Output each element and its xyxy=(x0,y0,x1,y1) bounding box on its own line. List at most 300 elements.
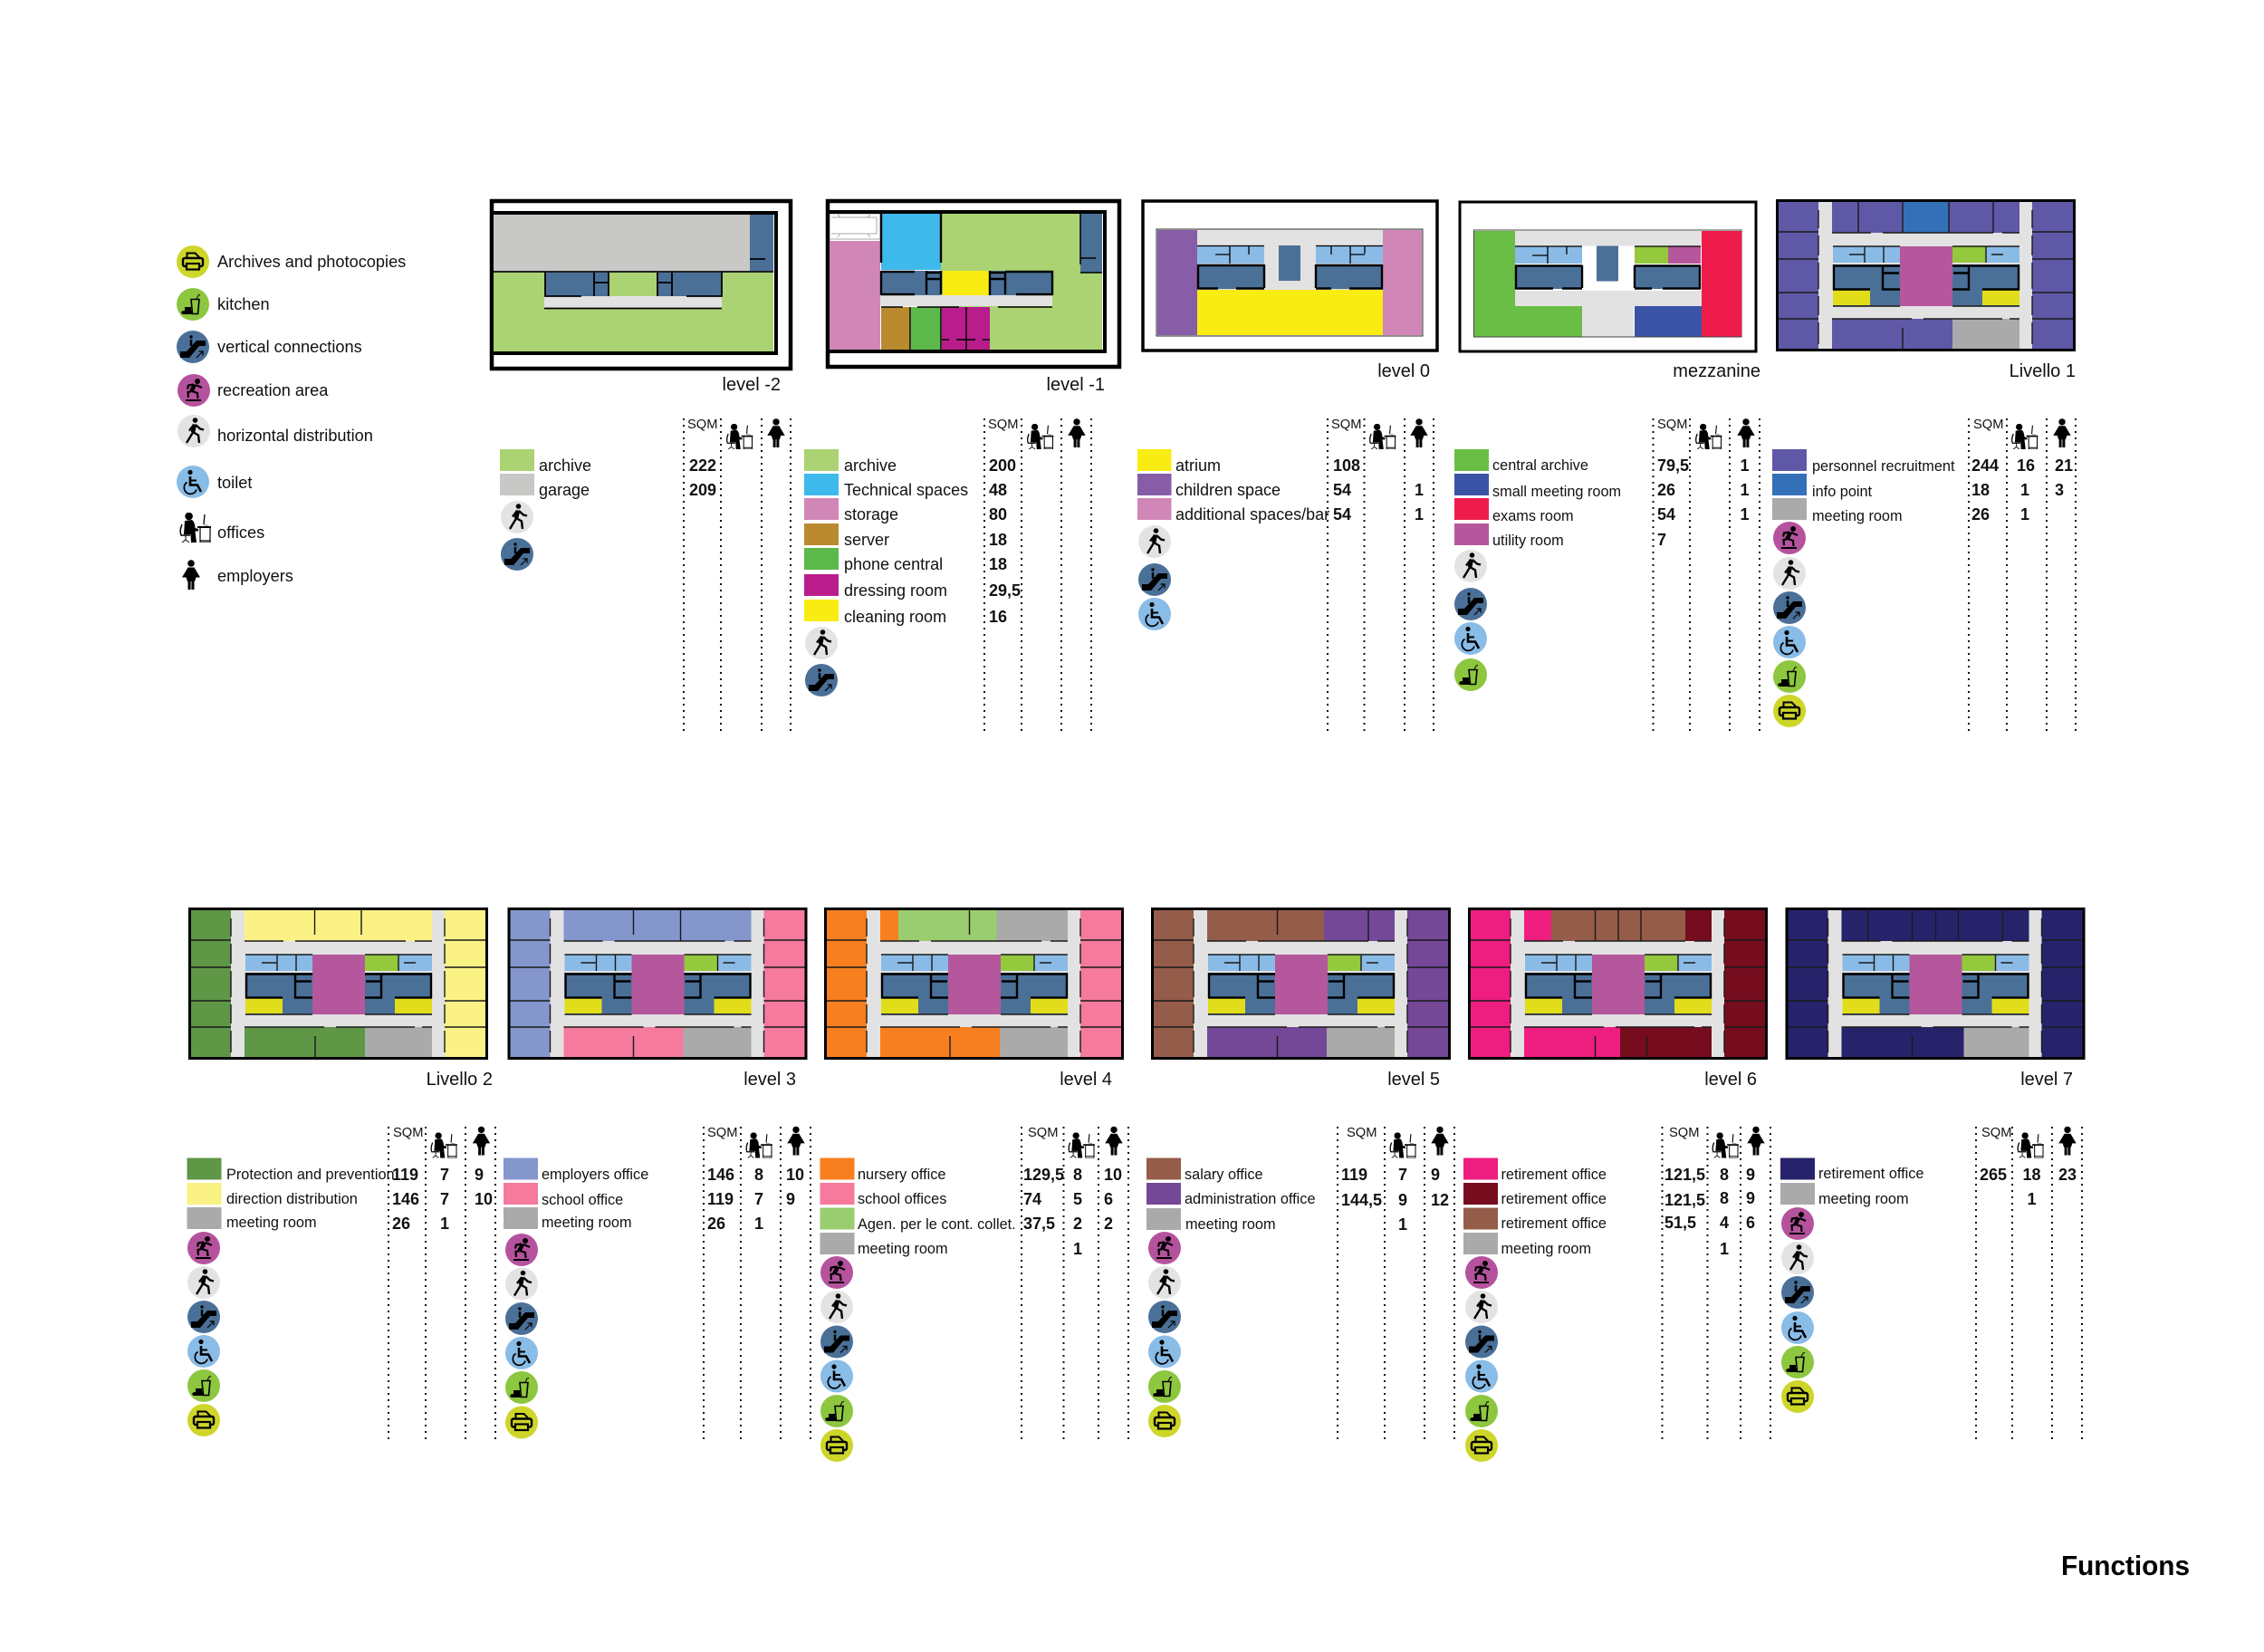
row: school office xyxy=(504,1183,795,1208)
legend item: vertical connections xyxy=(177,331,362,363)
icon: archives and photocopies xyxy=(505,1406,538,1438)
table rows xyxy=(1463,1157,1755,1462)
icon: horizontal distribution xyxy=(187,1266,220,1299)
row: dressing room: dressing room xyxy=(844,581,947,600)
icon: kitchen xyxy=(187,1369,220,1402)
floor plan: level 6 xyxy=(1468,908,1768,1060)
floor plan: level 4 xyxy=(824,908,1124,1060)
column rules xyxy=(684,418,791,735)
row: meeting room xyxy=(1772,498,2029,524)
label: Livello 1: Livello 1 xyxy=(2010,361,2076,381)
row: employers office: 10 xyxy=(786,1166,804,1184)
row: direction distribution xyxy=(187,1183,493,1208)
row: server: server xyxy=(844,531,889,549)
row: server xyxy=(804,523,1007,549)
row: phone central xyxy=(804,548,1007,573)
legend item: kitchen: kitchen xyxy=(217,295,270,313)
legend item: toilet xyxy=(177,466,252,498)
row: info point: info point xyxy=(1812,484,1873,500)
row: storage xyxy=(804,498,1007,523)
row: administration office: 12 xyxy=(1431,1191,1449,1209)
table header: SQM xyxy=(988,418,1018,432)
icon: horizontal distribution xyxy=(505,1268,538,1301)
icon: toilet xyxy=(1773,626,1806,658)
table header: SQM xyxy=(1331,418,1361,432)
row: nursery office: nursery office xyxy=(858,1167,945,1183)
row: additional spaces/bar: additional spaces/bar xyxy=(1175,505,1329,523)
row: meeting room: 1 xyxy=(754,1215,763,1233)
row: central archive: 1 xyxy=(1740,456,1750,475)
row: school office: school office xyxy=(542,1192,623,1208)
row: administration office xyxy=(1146,1183,1449,1209)
row: cleaning room: cleaning room xyxy=(844,608,946,626)
row: retirement office: 265 xyxy=(1980,1166,2007,1184)
row: school offices: 74 xyxy=(1023,1190,1041,1208)
table header xyxy=(1981,1126,2077,1157)
row: administration office: 9 xyxy=(1398,1191,1407,1209)
table header: SQM xyxy=(1669,1126,1699,1140)
row: protection and prevention: 119 xyxy=(392,1166,418,1184)
column rules xyxy=(704,1127,811,1443)
row: retirement office (pink): 8 xyxy=(1720,1166,1729,1184)
legend item: archives and photocopies: Archives and photocopies xyxy=(217,253,406,271)
row: salary office: 7 xyxy=(1398,1166,1407,1184)
row: exams room: exams room xyxy=(1492,508,1574,524)
icon: toilet xyxy=(1781,1311,1814,1344)
row: meeting room xyxy=(820,1233,1082,1258)
icon: toilet xyxy=(1138,598,1171,630)
row: phone central: 18 xyxy=(989,555,1007,573)
row: personnel recruitment: 21 xyxy=(2055,456,2073,475)
row: school offices xyxy=(820,1183,1113,1208)
label: mezzanine: mezzanine xyxy=(1673,361,1760,381)
row: retirement office (brown) xyxy=(1463,1208,1755,1232)
table: level -1 xyxy=(804,418,1091,735)
icon: kitchen xyxy=(820,1395,853,1427)
label: level 6: level 6 xyxy=(1704,1070,1757,1090)
table rows xyxy=(187,1157,493,1436)
table header xyxy=(707,1126,805,1157)
row: meeting room: 1 xyxy=(1720,1240,1729,1258)
floor plan: level -2 xyxy=(492,201,791,369)
icon: vertical connections xyxy=(805,664,838,696)
row: direction distribution: direction distribution xyxy=(226,1191,358,1207)
row: meeting room: meeting room xyxy=(1818,1191,1909,1207)
row: children space: 1 xyxy=(1415,481,1424,499)
row: garage: 209 xyxy=(689,481,716,499)
row: meeting room xyxy=(1146,1208,1407,1234)
row: agen. per le cont. collet. xyxy=(820,1208,1113,1233)
icon: kitchen xyxy=(1781,1346,1814,1378)
table header: SQM xyxy=(393,1126,423,1140)
column rules xyxy=(389,1127,495,1443)
row: meeting room xyxy=(504,1207,763,1233)
column rules xyxy=(1328,418,1434,735)
icon: recreation area xyxy=(820,1256,853,1289)
table: level 7 xyxy=(1780,1126,2082,1443)
row: agen. per le cont. collet.: 2 xyxy=(1104,1215,1113,1233)
row: employers office: 146 xyxy=(707,1166,734,1184)
row: agen. per le cont. collet.: Agen. per le cont. collet. xyxy=(858,1216,1016,1233)
row: personnel recruitment: personnel recruitment xyxy=(1812,458,1955,475)
row: retirement office xyxy=(1780,1157,2077,1184)
row: retirement office (dark red): 121,5 xyxy=(1664,1191,1705,1209)
icon: horizontal distribution xyxy=(1465,1291,1498,1323)
legend item: offices xyxy=(180,513,264,543)
table rows xyxy=(804,449,1021,696)
table header: SQM xyxy=(1981,1126,2011,1140)
row: retirement office (pink): retirement office xyxy=(1501,1167,1607,1183)
floor plan: level -1 xyxy=(828,201,1119,367)
row: retirement office (dark red) xyxy=(1463,1183,1755,1209)
row: cleaning room xyxy=(804,600,1007,626)
icon: vertical connections xyxy=(1465,1326,1498,1359)
row: technical spaces: 48 xyxy=(989,481,1007,499)
icon: horizontal distribution xyxy=(1138,525,1171,558)
legend item: recreation area: recreation area xyxy=(217,381,329,399)
column rules xyxy=(984,418,1091,735)
row: dressing room xyxy=(804,574,1021,600)
icon: horizontal distribution xyxy=(820,1291,853,1323)
row: nursery office xyxy=(820,1157,1122,1184)
icon: kitchen xyxy=(1465,1395,1498,1427)
legend item: offices: offices xyxy=(217,523,264,542)
row: salary office: salary office xyxy=(1185,1167,1263,1183)
floor plan: mezzanine xyxy=(1460,202,1756,351)
row: small meeting room xyxy=(1454,474,1750,500)
icon: recreation area xyxy=(505,1234,538,1266)
row: exams room: 1 xyxy=(1740,505,1750,523)
row: archive xyxy=(804,449,1016,475)
row: protection and prevention: Protection and prevention xyxy=(226,1167,395,1183)
row: garage: garage xyxy=(539,481,590,499)
row: retirement office (brown): 6 xyxy=(1746,1214,1755,1232)
row: exams room: 54 xyxy=(1657,505,1675,523)
icon: vertical connections xyxy=(1454,588,1487,620)
icon: archives and photocopies xyxy=(820,1429,853,1462)
row: direction distribution: 7 xyxy=(440,1190,449,1208)
row: utility room: utility room xyxy=(1492,533,1564,549)
row: administration office: 144,5 xyxy=(1341,1191,1382,1209)
row: direction distribution: 146 xyxy=(392,1190,419,1208)
table rows xyxy=(500,449,716,571)
icon: recreation area xyxy=(1465,1256,1498,1289)
row: protection and prevention: 9 xyxy=(475,1166,484,1184)
row: archive xyxy=(500,449,716,475)
row: administration office: administration office xyxy=(1185,1191,1315,1207)
table header: SQM xyxy=(1657,418,1687,432)
row: retirement office (brown): retirement office xyxy=(1501,1215,1607,1232)
row: retirement office: 18 xyxy=(2022,1166,2041,1184)
label: level 3: level 3 xyxy=(743,1070,796,1090)
legend item: horizontal distribution xyxy=(177,415,373,447)
label: level 0: level 0 xyxy=(1377,361,1430,381)
table header xyxy=(1657,418,1755,449)
label: level -1: level -1 xyxy=(1047,375,1105,395)
icon: archives and photocopies xyxy=(187,1404,220,1436)
row: info point xyxy=(1772,474,2064,500)
icon: kitchen xyxy=(1454,658,1487,691)
table header: SQM xyxy=(687,418,717,432)
row: utility room: 7 xyxy=(1657,531,1666,549)
row: agen. per le cont. collet.: 37,5 xyxy=(1023,1215,1055,1233)
icon: vertical connections xyxy=(820,1326,853,1359)
row: nursery office: 10 xyxy=(1104,1166,1122,1184)
floor plan: Livello 1 xyxy=(1776,199,2076,351)
legend item: archives and photocopies xyxy=(177,245,406,278)
table header xyxy=(393,1126,490,1157)
table rows xyxy=(1780,1157,2077,1413)
row: atrium: atrium xyxy=(1175,456,1221,475)
row: technical spaces: Technical spaces xyxy=(844,481,968,499)
legend item: employers xyxy=(182,560,293,590)
row: small meeting room: 26 xyxy=(1657,481,1675,499)
column rules xyxy=(1022,1127,1128,1443)
row: protection and prevention xyxy=(187,1157,484,1184)
row: meeting room xyxy=(1780,1183,2037,1208)
row: employers office xyxy=(504,1157,804,1184)
row: exams room xyxy=(1454,498,1750,524)
icon: vertical connections xyxy=(1138,563,1171,596)
column rules xyxy=(1654,418,1760,735)
legend item: recreation area xyxy=(177,374,329,407)
row: retirement office (dark red): 8 xyxy=(1720,1189,1729,1207)
row: additional spaces/bar xyxy=(1137,498,1424,523)
row: meeting room xyxy=(187,1207,449,1233)
row: children space: 54 xyxy=(1333,481,1351,499)
row: retirement office: retirement office xyxy=(1818,1166,1923,1182)
floor plan: level 0 xyxy=(1143,201,1437,351)
row: technical spaces xyxy=(804,474,1007,499)
table header xyxy=(1028,1126,1123,1157)
floor plan: level 3 xyxy=(507,908,808,1060)
legend item: kitchen xyxy=(177,288,270,321)
icon: recreation area xyxy=(1781,1207,1814,1240)
table header xyxy=(988,418,1086,449)
icon: horizontal distribution xyxy=(1773,557,1806,590)
row: atrium: 108 xyxy=(1333,456,1360,475)
row: dressing room: 29,5 xyxy=(989,581,1021,600)
table: Livello 1 xyxy=(1772,418,2076,735)
icon: horizontal distribution xyxy=(501,501,533,533)
label: level 5: level 5 xyxy=(1387,1070,1440,1090)
icon: vertical connections xyxy=(501,538,533,571)
label: Livello 2: Livello 2 xyxy=(427,1070,493,1090)
table: level 3 xyxy=(504,1126,811,1443)
icon: horizontal distribution xyxy=(1148,1266,1181,1299)
row: archive: archive xyxy=(539,456,591,475)
legend item: vertical connections: vertical connections xyxy=(217,338,362,356)
icon: archives and photocopies xyxy=(1773,695,1806,727)
label: level -2: level -2 xyxy=(723,375,781,395)
icon: toilet xyxy=(505,1337,538,1369)
table rows xyxy=(1454,449,1750,691)
icon: recreation area xyxy=(1773,522,1806,554)
icon: toilet xyxy=(187,1335,220,1368)
row: meeting room: meeting room xyxy=(226,1215,317,1231)
table: level 6 xyxy=(1463,1126,1770,1462)
row: server: 18 xyxy=(989,531,1007,549)
row: atrium xyxy=(1137,449,1360,475)
table header xyxy=(1331,418,1428,449)
row: retirement office (brown): 51,5 xyxy=(1664,1214,1696,1232)
row: retirement office (dark red): retirement office xyxy=(1501,1191,1607,1207)
label: level 4: level 4 xyxy=(1060,1070,1112,1090)
icon: horizontal distribution xyxy=(805,627,838,659)
row: meeting room: 26 xyxy=(707,1215,725,1233)
row: meeting room: meeting room xyxy=(858,1241,948,1257)
row: storage: 80 xyxy=(989,505,1007,523)
row: salary office: 119 xyxy=(1341,1166,1367,1184)
row: info point: 3 xyxy=(2055,481,2064,499)
column rules xyxy=(1663,1127,1770,1443)
row: nursery office: 8 xyxy=(1073,1166,1082,1184)
floor plan: Livello 2 xyxy=(188,908,488,1060)
floor plan: level 7 xyxy=(1786,908,2085,1060)
row: phone central: phone central xyxy=(844,555,943,573)
row: meeting room xyxy=(1463,1233,1729,1258)
row: retirement office (pink) xyxy=(1463,1157,1755,1184)
row: info point: 1 xyxy=(2020,481,2029,499)
icon: vertical connections xyxy=(1781,1276,1814,1309)
table rows xyxy=(1146,1157,1449,1437)
row: retirement office (pink): 121,5 xyxy=(1664,1166,1705,1184)
table header xyxy=(687,418,785,449)
row: meeting room: meeting room xyxy=(1501,1241,1591,1257)
row: meeting room: meeting room xyxy=(1185,1216,1276,1233)
icon: toilet xyxy=(1465,1360,1498,1393)
icon: archives and photocopies xyxy=(1781,1380,1814,1413)
legend item: horizontal distribution: horizontal distribution xyxy=(217,427,373,445)
row: meeting room: 1 xyxy=(2020,505,2029,523)
table header xyxy=(1973,418,2071,449)
row: additional spaces/bar: 1 xyxy=(1415,505,1424,523)
row: school offices: 6 xyxy=(1104,1190,1113,1208)
table rows xyxy=(504,1157,804,1438)
icon: horizontal distribution xyxy=(1454,550,1487,582)
row: cleaning room: 16 xyxy=(989,608,1007,626)
table header xyxy=(1347,1126,1449,1157)
row: children space xyxy=(1137,474,1424,499)
table: level 0 xyxy=(1137,418,1434,735)
row: salary office: 9 xyxy=(1431,1166,1440,1184)
table: mezzanine xyxy=(1454,418,1760,735)
table: level 4 xyxy=(820,1126,1128,1462)
table header: SQM xyxy=(1028,1126,1058,1140)
icon: vertical connections xyxy=(505,1302,538,1335)
row: utility room xyxy=(1454,523,1666,549)
row: retirement office (brown): 4 xyxy=(1720,1214,1729,1232)
row: storage: storage xyxy=(844,505,898,523)
icon: recreation area xyxy=(187,1232,220,1264)
row: employers office: employers office xyxy=(542,1167,648,1183)
row: central archive xyxy=(1454,449,1750,475)
row: meeting room: 1 xyxy=(1073,1240,1082,1258)
table header: SQM xyxy=(1347,1126,1377,1140)
row: archive: 222 xyxy=(689,456,716,475)
row: archive: archive xyxy=(844,456,897,475)
row: additional spaces/bar: 54 xyxy=(1333,505,1351,523)
row: employers office: 8 xyxy=(754,1166,763,1184)
icon: archives and photocopies xyxy=(1465,1429,1498,1462)
row: retirement office (dark red): 9 xyxy=(1746,1189,1755,1207)
row: personnel recruitment xyxy=(1772,449,2073,475)
table: Livello 2 xyxy=(187,1126,495,1443)
table rows xyxy=(1772,449,2073,727)
table: level 5 xyxy=(1146,1126,1454,1443)
row: retirement office: 23 xyxy=(2058,1166,2077,1184)
row: central archive: central archive xyxy=(1492,457,1588,474)
table header: SQM xyxy=(707,1126,737,1140)
row: meeting room: meeting room xyxy=(1812,508,1903,524)
row: info point: 18 xyxy=(1971,481,1990,499)
icon: vertical connections xyxy=(187,1301,220,1333)
row: retirement office (pink): 9 xyxy=(1746,1166,1755,1184)
legend item: employers: employers xyxy=(217,567,293,585)
row: nursery office: 129,5 xyxy=(1023,1166,1064,1184)
legend item: toilet: toilet xyxy=(217,474,252,492)
table rows xyxy=(820,1157,1122,1462)
row: direction distribution: 10 xyxy=(475,1190,493,1208)
row: school office: 9 xyxy=(786,1190,795,1208)
row: meeting room: meeting room xyxy=(542,1215,632,1231)
legend xyxy=(177,245,406,590)
row: children space: children space xyxy=(1175,481,1281,499)
column rules xyxy=(1976,1127,2082,1443)
column rules xyxy=(1338,1127,1454,1443)
label: level 7: level 7 xyxy=(2020,1070,2073,1090)
row: garage xyxy=(500,474,716,499)
table header: SQM xyxy=(1973,418,2003,432)
row: school offices: 5 xyxy=(1073,1190,1082,1208)
icon: toilet xyxy=(1454,622,1487,655)
row: small meeting room: 1 xyxy=(1740,481,1750,499)
row: school office: 119 xyxy=(707,1190,734,1208)
row: agen. per le cont. collet.: 2 xyxy=(1073,1215,1082,1233)
row: central archive: 79,5 xyxy=(1657,456,1689,475)
row: meeting room: 1 xyxy=(1398,1215,1407,1234)
row: meeting room: 26 xyxy=(392,1215,410,1233)
title: Functions xyxy=(2061,1550,2190,1581)
table header xyxy=(1669,1126,1765,1157)
row: meeting room: 1 xyxy=(2027,1190,2037,1208)
icon: vertical connections xyxy=(1148,1301,1181,1333)
table rows xyxy=(1137,449,1424,630)
row: meeting room: 1 xyxy=(440,1215,449,1233)
floor plan: level 5 xyxy=(1151,908,1451,1060)
row: personnel recruitment: 16 xyxy=(2017,456,2035,475)
row: archive: 200 xyxy=(989,456,1016,475)
row: personnel recruitment: 244 xyxy=(1971,456,1999,475)
icon: toilet xyxy=(1148,1335,1181,1368)
icon: recreation area xyxy=(1148,1232,1181,1264)
icon: kitchen xyxy=(1773,660,1806,693)
icon: horizontal distribution xyxy=(1781,1242,1814,1274)
icon: vertical connections xyxy=(1773,591,1806,624)
icon: kitchen xyxy=(1148,1370,1181,1403)
row: school office: 7 xyxy=(754,1190,763,1208)
table: level -2 xyxy=(500,418,791,735)
row: meeting room: 26 xyxy=(1971,505,1990,523)
icon: archives and photocopies xyxy=(1148,1405,1181,1437)
row: salary office xyxy=(1146,1157,1440,1184)
row: small meeting room: small meeting room xyxy=(1492,484,1621,500)
row: protection and prevention: 7 xyxy=(440,1166,449,1184)
icon: toilet xyxy=(820,1360,853,1393)
row: school offices: school offices xyxy=(858,1191,946,1207)
column rules xyxy=(1969,418,2076,735)
icon: kitchen xyxy=(505,1371,538,1404)
